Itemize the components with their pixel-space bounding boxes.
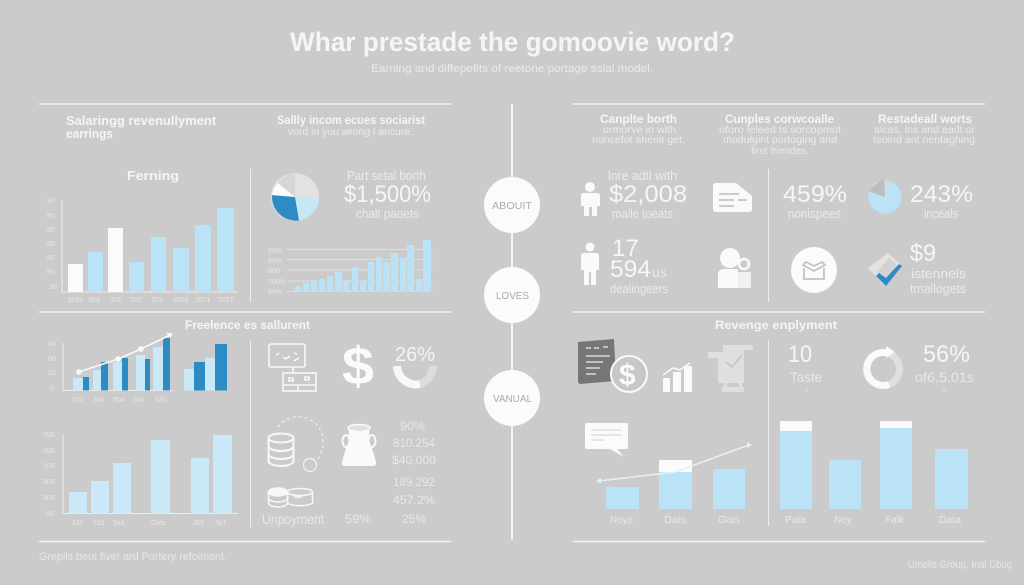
- stat: 17 594us: us: [652, 264, 667, 280]
- stat: part setal borth: $1,500%: [344, 181, 431, 208]
- mini bar chart: 800: [268, 268, 280, 275]
- bar chart: lower left: 00: [46, 511, 54, 518]
- icon: document: [713, 183, 752, 212]
- stat list: [392, 419, 436, 507]
- bar chart: ferning: [47, 198, 238, 304]
- stat: $9: $9: [910, 240, 936, 267]
- panel: bottom left: [43, 318, 436, 527]
- column heading 2: firet friendes.: [751, 146, 809, 157]
- bar chart: lower left: [43, 432, 238, 527]
- stat: 17 594us: [610, 235, 668, 296]
- combo chart: 10: [48, 370, 56, 377]
- icon: standing person: [581, 242, 599, 285]
- icon: coins: [268, 488, 313, 507]
- column heading 3: [873, 112, 976, 146]
- bar chart: ferning: 2071: [195, 297, 211, 304]
- icon: monitor: [269, 344, 316, 391]
- column heading 3: teoind ant nentaghing: [873, 135, 975, 146]
- column heading 1: Canplte borth: [600, 112, 677, 126]
- column heading 2: Cunples corwcoalle: [725, 112, 834, 126]
- bar chart: lower right: Falk: [885, 515, 905, 526]
- title: Whar prestade the gomoovie word?: [290, 27, 735, 57]
- heading: income: Sallly incom ecues sociarist: [277, 113, 425, 127]
- mini bar chart: 50%: [268, 248, 282, 255]
- node: about: [484, 177, 540, 233]
- bar and line chart: Gats: [718, 515, 740, 526]
- bar chart: lower left: 300: [43, 479, 55, 486]
- column heading 3: Restadeall worts: [878, 112, 972, 126]
- column heading 1: [592, 112, 685, 146]
- column heading 2: oforo leleed ts sorcopmot: [719, 125, 841, 136]
- bar and line chart: Dats: [664, 515, 686, 526]
- bar chart: lower left: 100: [43, 463, 55, 470]
- bar chart: ferning: 301: [110, 297, 122, 304]
- bar chart: lower right: [780, 421, 968, 526]
- heading: freelence: Freelence es sallurent: [185, 318, 310, 332]
- combo chart: [48, 333, 227, 404]
- icon: document with dollar: $: [619, 359, 636, 392]
- icon: person: [581, 182, 600, 216]
- icon: vase: [342, 424, 376, 466]
- stat: 26% gauge: 26%: [395, 344, 435, 366]
- bar chart: lower left: 301: [193, 520, 205, 527]
- central timeline: [484, 104, 540, 540]
- bar chart: ferning: 571: [152, 297, 164, 304]
- stat: 243%: [910, 181, 973, 221]
- icon: monitor check: [708, 345, 753, 392]
- bar chart: lower left: 300: [43, 495, 55, 502]
- subtitle: Earning and diffepefits of reetone portage ssial model.: [371, 63, 653, 75]
- bar chart: ferning: 90: [47, 198, 55, 205]
- bar chart: ferning: 80: [47, 227, 55, 234]
- stat: 56%: o: [943, 388, 947, 394]
- stat: $9: istennels: [911, 266, 967, 281]
- bar chart: lower left: 1a1: [93, 520, 105, 527]
- footer note left: Grepils beut fiver ard Portery refoiment.: [39, 551, 227, 563]
- bar chart: ferning: 393: [88, 297, 100, 304]
- combo chart: 541: [133, 397, 145, 404]
- stat: 25%: 25%: [402, 512, 426, 526]
- stat: $9: [910, 240, 967, 296]
- column heading 2: modulgint portoging and: [723, 135, 837, 146]
- stat: 459%: [783, 181, 847, 221]
- bar chart: lower left: 341: [72, 520, 84, 527]
- node: loves: LOVES: [496, 291, 529, 302]
- bar chart: lower right: Pata: [785, 515, 806, 526]
- stat: part setal borth: chalt paoets: [356, 206, 419, 221]
- bar chart: ferning: 60: [47, 241, 55, 248]
- bar chart: ferning: 2017: [218, 297, 234, 304]
- mini bar chart: 80%: [268, 258, 282, 265]
- pie chart: [271, 173, 319, 221]
- icon: bars with arrow: [663, 363, 692, 392]
- bar chart: lower left: 3a1: [113, 520, 125, 527]
- bar chart: ferning: 60: [47, 213, 55, 220]
- bar chart: ferning: 2091: [68, 297, 84, 304]
- combo chart: 504: [113, 397, 125, 404]
- bar chart: ferning: 2018: [173, 297, 189, 304]
- stat: 243%: 243%: [910, 181, 973, 208]
- bar chart: lower left: 3a1: [215, 520, 227, 527]
- stat: 10 taste: o: [805, 388, 809, 394]
- stat: 56%: [915, 341, 974, 394]
- panel: top right: [581, 112, 976, 296]
- label: unpoyment: Unpoyment: [262, 511, 324, 527]
- icon: user with badge: [718, 248, 751, 288]
- panel: top left: [47, 113, 433, 304]
- bar chart: lower right: Data: [939, 515, 961, 526]
- stat list: 810.254: [393, 436, 435, 450]
- heading: income: [277, 113, 425, 138]
- stat: 243%: inceals: [924, 206, 958, 221]
- heading: earnings: [66, 113, 217, 141]
- stat: 459%: 459%: [783, 181, 847, 208]
- bar and line chart: [596, 442, 752, 526]
- icon: dollar: $: [342, 337, 374, 396]
- panel: bottom right: [578, 318, 974, 526]
- column heading 3: aicas, ins and eadt or: [874, 125, 976, 136]
- stat list: 90%: [400, 419, 425, 433]
- combo chart: 0: [50, 386, 54, 393]
- stat: 10 taste: 10: [788, 341, 812, 368]
- column heading 1: noncefot ahenit get.: [592, 135, 685, 146]
- stat list: $40,000: [392, 453, 436, 467]
- node: about: ABOUIT: [492, 201, 532, 212]
- bar chart: lower left: Data: [151, 520, 166, 527]
- stat: 10 taste: Taste: [790, 369, 822, 385]
- heading: earnings: earrings: [66, 126, 113, 141]
- stat: 56%: of6.5.01s: [915, 369, 974, 385]
- speech bubble: [585, 423, 628, 457]
- bar chart: lower left: 000: [43, 448, 55, 455]
- node: loves: [484, 267, 540, 323]
- stat: 56%: 56%: [923, 341, 970, 368]
- icon: envelope circle: [791, 247, 837, 293]
- stat: 26% gauge: [395, 344, 435, 384]
- icon: pie: [868, 178, 902, 214]
- bar chart: ferning: 10: [49, 284, 57, 291]
- mini bar chart: 100%: [268, 279, 286, 286]
- stat: $2,008: [608, 168, 687, 221]
- heading: income: vord in you wrong l ancure.: [288, 127, 413, 138]
- column heading 2: [719, 112, 841, 157]
- icon: check document: [868, 253, 902, 286]
- stat: 59%: 59%: [345, 512, 371, 526]
- stat: $2,008: $2,008: [609, 181, 687, 208]
- heading: earnings: Salaringg revenullyment: [66, 113, 217, 128]
- combo chart: 00: [48, 356, 56, 363]
- bar and line chart: Noyo: [610, 515, 633, 526]
- mini bar chart: 90%: [268, 289, 282, 296]
- mini bar chart: [268, 240, 433, 296]
- icon: document with dollar: [578, 339, 647, 392]
- stat: 17 594us: 594: [610, 256, 651, 283]
- combo chart: 101: [72, 397, 84, 404]
- combo chart: 341: [93, 397, 105, 404]
- stat: 17 594us: dealingeers: [610, 281, 668, 296]
- chart heading: ferning: Ferning: [127, 168, 179, 183]
- bar chart: ferning: 203: [130, 297, 142, 304]
- icon: cycle ring: [866, 346, 900, 386]
- bar chart: lower right: Noy: [834, 515, 852, 526]
- stat: 10 taste: [788, 341, 822, 394]
- icon: database: [268, 417, 323, 472]
- stat list: 457.2%: [393, 493, 435, 507]
- node: vanual: VANUAL: [493, 394, 532, 405]
- stat: part setal borth: [344, 168, 431, 221]
- bar chart: ferning: 50: [47, 255, 55, 262]
- stat: 459%: nonispees: [788, 206, 841, 221]
- node: vanual: [484, 370, 540, 426]
- heading: revenge: Revenge enplyment: [715, 318, 837, 332]
- stat: $2,008: malle toeats: [612, 206, 673, 221]
- stat: 17 594us: 17: [612, 235, 639, 262]
- column heading 1: ormorve in with: [603, 125, 676, 136]
- stat: part setal borth: Part setal borth: [347, 168, 426, 183]
- combo chart: 04: [48, 341, 56, 348]
- bar chart: lower left: 700: [43, 432, 55, 439]
- stat: $2,008: lnre adtl with: [608, 168, 677, 183]
- bar chart: ferning: 50: [47, 269, 55, 276]
- stat list: 189.292: [393, 475, 435, 489]
- stat: $9: tmallogets: [910, 281, 966, 296]
- combo chart: 531: [155, 397, 167, 404]
